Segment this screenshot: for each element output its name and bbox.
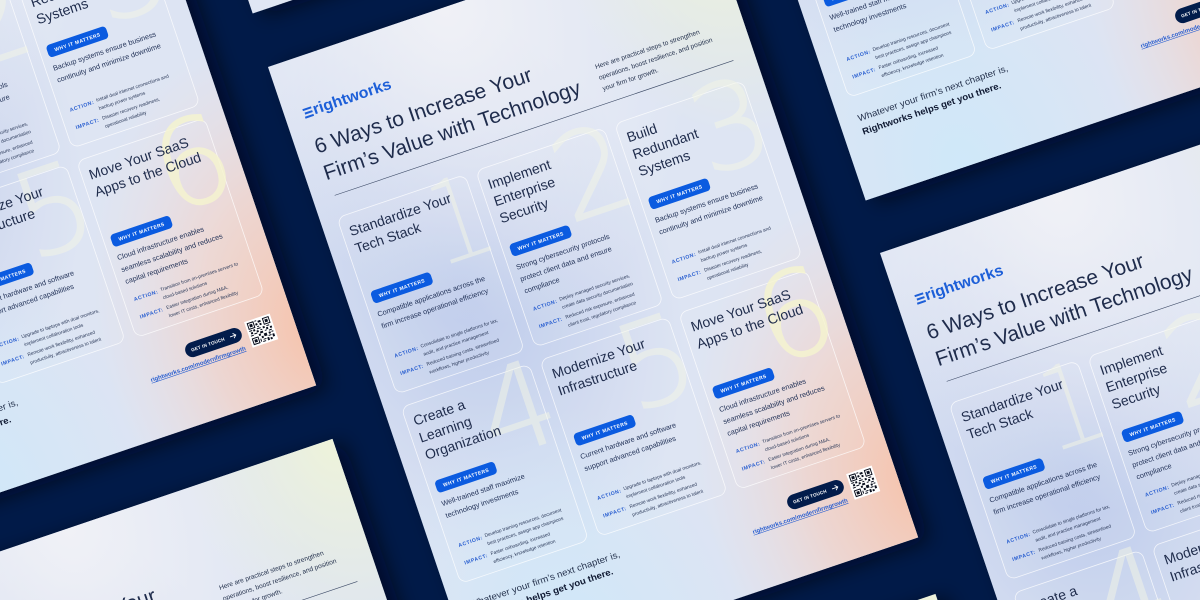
card 5: IMPACT: <box>990 20 1016 34</box>
card 5: implement collaboration tools <box>23 322 85 348</box>
card 6: Transition from on-premises servers to <box>761 413 841 445</box>
card 1: workflows, higher productivity <box>429 350 490 376</box>
card 4: efficiency, knowledge retention <box>881 52 945 79</box>
card 4: IMPACT: <box>464 553 489 567</box>
card 2: ACTION: <box>1144 485 1170 499</box>
card 5: productivity, attractiveness to talent <box>30 336 103 366</box>
intro text: your firm for growth. <box>602 67 660 93</box>
card 4: Organization <box>423 422 503 463</box>
website link: rightworks.com/modernfirmgrowth <box>752 498 849 536</box>
card 1: ACTION: <box>394 346 420 360</box>
card 3: Redundant <box>630 125 700 162</box>
card 6: Move Your SaaS <box>87 134 191 183</box>
card 1: ACTION: <box>1006 532 1032 546</box>
card 3: ACTION: <box>69 100 95 114</box>
card 4: WHY IT MATTERS <box>442 467 490 489</box>
card 5: Modernize Your <box>550 335 647 382</box>
card 5 <box>530 285 739 536</box>
title <box>0 571 208 600</box>
get in touch button <box>1173 0 1200 25</box>
card 5 <box>1142 471 1200 600</box>
card 2: Reduced risk exposure, enhanced <box>565 292 636 321</box>
card 3: operational reliability <box>706 262 750 282</box>
card 6: 6 <box>135 86 251 241</box>
card 4: IMPACT: <box>852 67 877 81</box>
card 1 <box>931 304 1145 580</box>
card 6: WHY IT MATTERS <box>720 374 768 395</box>
card 3: continuity and minimize downtime <box>56 41 162 85</box>
card 4: best practices, assign app champions <box>875 30 953 61</box>
card 6: seamless scalability and reduces <box>722 383 826 426</box>
card 1: Compatible applications across the <box>376 274 486 319</box>
card 3: WHY IT MATTERS <box>54 32 102 53</box>
closing statement <box>0 397 24 471</box>
card 4: Develop training resources, document <box>872 21 951 53</box>
flyer: top sliver <box>43 0 693 13</box>
intro text <box>594 26 717 93</box>
card 2: client trust, regulatory compliance <box>567 300 637 329</box>
card 3: WHY IT MATTERS <box>656 184 704 205</box>
flyer: bottom sliver <box>495 594 1145 600</box>
card 1: Consolidate to single platforms for tax, <box>420 318 499 350</box>
card 1: 1 <box>1009 304 1122 485</box>
card 6: Easier integration during M&A, <box>768 437 831 463</box>
title: Firm’s Value with Technology <box>933 262 1196 371</box>
card 5: 5 <box>598 285 714 440</box>
QR code <box>846 466 880 500</box>
card 5: Remote work flexibility, enhanced <box>629 482 698 510</box>
flyer: main center <box>268 0 918 600</box>
card 2: WHY IT MATTERS <box>517 231 565 252</box>
card 5: productivity, attractiveness to talent <box>1020 2 1093 32</box>
flyer: left <box>0 0 316 534</box>
card 5: productivity, attractiveness to talent <box>632 488 705 518</box>
card 6: seamless scalability and reduces <box>120 231 224 274</box>
card 2: WHY IT MATTERS <box>1129 417 1177 438</box>
card 3: IMPACT: <box>677 270 702 283</box>
card 3: backup power systems <box>700 242 749 264</box>
card 1: IMPACT: <box>1012 550 1037 563</box>
card 3 <box>605 48 813 300</box>
card 6: Apps to the Cloud <box>694 301 805 352</box>
get in touch button <box>183 326 244 359</box>
card 4: technology investments <box>444 487 520 520</box>
card 1: WHY IT MATTERS <box>990 464 1038 485</box>
card 3: Backup systems ensure business <box>52 29 157 73</box>
card 6: ACTION: <box>133 289 159 303</box>
logo: rightworks <box>311 76 394 118</box>
card 4: Develop training resources, document <box>484 507 563 539</box>
closing statement: Rightworks helps get you there. <box>861 80 1002 137</box>
card 6: Move Your SaaS <box>689 286 793 335</box>
card 1: audit, and practice management <box>1035 516 1102 544</box>
card 3: IMPACT: <box>75 118 100 131</box>
card 5: support advanced capabilities <box>583 434 677 473</box>
card 1: audit, and practice management <box>423 330 490 358</box>
card 5: Remote work flexibility, enhanced <box>27 330 96 358</box>
card 6: cloud-based solutions <box>764 432 811 453</box>
card 4 <box>780 0 988 97</box>
card 3: continuity and minimize downtime <box>658 193 764 237</box>
card 1: 1 <box>397 118 510 299</box>
card 2: 2 <box>534 95 650 250</box>
card 1: Tech Stack <box>353 219 424 256</box>
card 6: cloud-based solutions <box>162 280 209 301</box>
card 1: Compatible applications across the <box>988 460 1098 505</box>
card 1: Tech Stack <box>965 405 1036 442</box>
card 6 <box>67 86 276 338</box>
get in touch button: GET IN TOUCH <box>190 336 226 353</box>
card 6: 6 <box>737 238 853 393</box>
card 5: Infrastructure <box>556 357 639 399</box>
flyer background <box>656 0 1200 200</box>
card 5: ACTION: <box>596 488 623 502</box>
card 6: capital requirements <box>124 256 189 286</box>
card 5: Upgrade to laptops with dual monitors, <box>21 308 100 340</box>
card 3: Build <box>625 120 659 145</box>
card 5: IMPACT: <box>602 506 628 520</box>
card 5: ACTION: <box>984 2 1011 16</box>
card 6: ACTION: <box>735 441 761 455</box>
card 3: operational reliability <box>104 110 148 130</box>
card 5: Upgrade to laptops with dual monitors, <box>623 460 702 492</box>
card 6: IMPACT: <box>741 459 766 473</box>
card 6: lower IT costs, enhanced flexibility <box>168 290 240 319</box>
flyer: lower right <box>880 104 1200 600</box>
card 1: Reduced training costs, streamlined <box>426 337 500 368</box>
card 2: ACTION: <box>532 299 558 313</box>
card 1: firm increase operational efficiency <box>380 286 490 331</box>
card 2: Deploy managed security services, <box>559 273 631 303</box>
card 2: Enterprise <box>1104 360 1169 395</box>
card 5: Current hardware and software <box>579 420 677 461</box>
title: 6 Ways to Increase Your <box>924 250 1147 344</box>
card 6: lower IT costs, enhanced flexibility <box>770 442 842 471</box>
card 6: Transition from on-premises servers to <box>159 261 239 293</box>
card 1: IMPACT: <box>400 364 425 377</box>
card 4: Faster onboarding, increased <box>878 45 939 71</box>
intro text: Here are practical steps to strengthen <box>594 29 701 71</box>
card 5: IMPACT: <box>0 354 26 368</box>
card 2: IMPACT: <box>538 317 563 330</box>
card 2: IMPACT: <box>1150 503 1175 516</box>
card 2: create data security documentation <box>561 281 634 311</box>
card 3: Systems <box>636 147 692 179</box>
card 3: Disaster recovery readiness, <box>703 249 763 274</box>
card 1: Standardize Your <box>959 376 1065 425</box>
get in touch button <box>785 478 846 511</box>
card 2: compliance <box>523 275 561 295</box>
card 2: Security <box>497 195 550 226</box>
card 2: Security <box>1109 381 1162 412</box>
card 3: backup power systems <box>98 90 147 112</box>
card 4: Well-trained staff maximize <box>440 472 526 508</box>
card 2: Strong cybersecurity protocols <box>515 232 611 272</box>
card 3: ACTION: <box>671 252 697 266</box>
card 1: WHY IT MATTERS <box>378 278 426 299</box>
get in touch button: GET IN TOUCH <box>792 488 828 505</box>
card 4: ACTION: <box>458 535 484 549</box>
card 4: ACTION: <box>846 49 872 63</box>
card 5: implement collaboration tools <box>625 474 687 500</box>
card 3: Install dual internet connections and <box>95 73 170 104</box>
flyer background <box>0 0 316 534</box>
website link: rightworks.com/modernfirmgrowth <box>150 346 247 384</box>
card 4: Learning <box>417 413 474 446</box>
card 3: Install dual internet connections and <box>697 225 772 256</box>
card 5 <box>0 133 137 384</box>
intro text: operations, boost resilience, and position <box>598 37 714 82</box>
card 1: Consolidate to single platforms for tax, <box>1032 504 1111 536</box>
card 1: firm increase operational efficiency <box>992 472 1102 517</box>
card 6: Cloud infrastructure enables <box>718 376 807 414</box>
flyer: lower left <box>0 439 542 600</box>
card 4: Create a <box>411 396 467 429</box>
card 5: WHY IT MATTERS <box>581 421 629 442</box>
card 2: protect client data and ensure <box>519 244 613 284</box>
flyer background <box>268 0 918 600</box>
flyer: upper right <box>656 0 1200 200</box>
card 3: Backup systems ensure business <box>654 181 759 225</box>
card 4: Faster onboarding, increased <box>490 531 551 557</box>
card 2 <box>466 95 675 347</box>
QR code <box>244 314 278 348</box>
card 2 <box>0 0 73 195</box>
card 6: Apps to the Cloud <box>92 149 203 200</box>
card 6: capital requirements <box>726 408 791 438</box>
card 4: best practices, assign app champions <box>487 516 565 547</box>
logo: rightworks <box>923 262 1006 304</box>
card 4: 4 <box>460 332 575 487</box>
intro text: Here are practical steps to strengthen <box>218 550 325 592</box>
flyer background <box>0 439 542 600</box>
card 1: Reduced training costs, streamlined <box>1038 523 1112 554</box>
card 4 <box>392 332 600 583</box>
card 4: technology investments <box>832 1 908 34</box>
card 6: WHY IT MATTERS <box>118 222 166 243</box>
card 6: IMPACT: <box>139 307 164 321</box>
card 2: Implement <box>486 156 553 192</box>
card 6 <box>669 238 878 490</box>
card 6: Easier integration during M&A, <box>166 285 229 311</box>
closing statement: Whatever your firm’s next chapter is, <box>856 63 1009 123</box>
card 4: efficiency, knowledge retention <box>493 538 557 565</box>
card 2: Implement <box>1098 342 1165 378</box>
flyer background <box>880 104 1200 600</box>
card 2: compliance <box>1135 461 1173 481</box>
card 2 <box>1078 281 1200 533</box>
card 3: Disaster recovery readiness, <box>101 97 161 122</box>
title: 6 Ways to Increase Your <box>312 64 535 158</box>
card 3 <box>3 0 211 148</box>
card 4 <box>1004 518 1200 600</box>
card 1: Standardize Your <box>347 190 453 239</box>
card 2: Enterprise <box>492 174 557 209</box>
card 1 <box>319 118 533 394</box>
card 1: workflows, higher productivity <box>1041 536 1102 562</box>
card 3: 3 <box>673 48 788 203</box>
title: Firm’s Value with Technology <box>321 76 584 185</box>
card 5 <box>918 0 1127 50</box>
card 6: Cloud infrastructure enables <box>116 224 205 262</box>
